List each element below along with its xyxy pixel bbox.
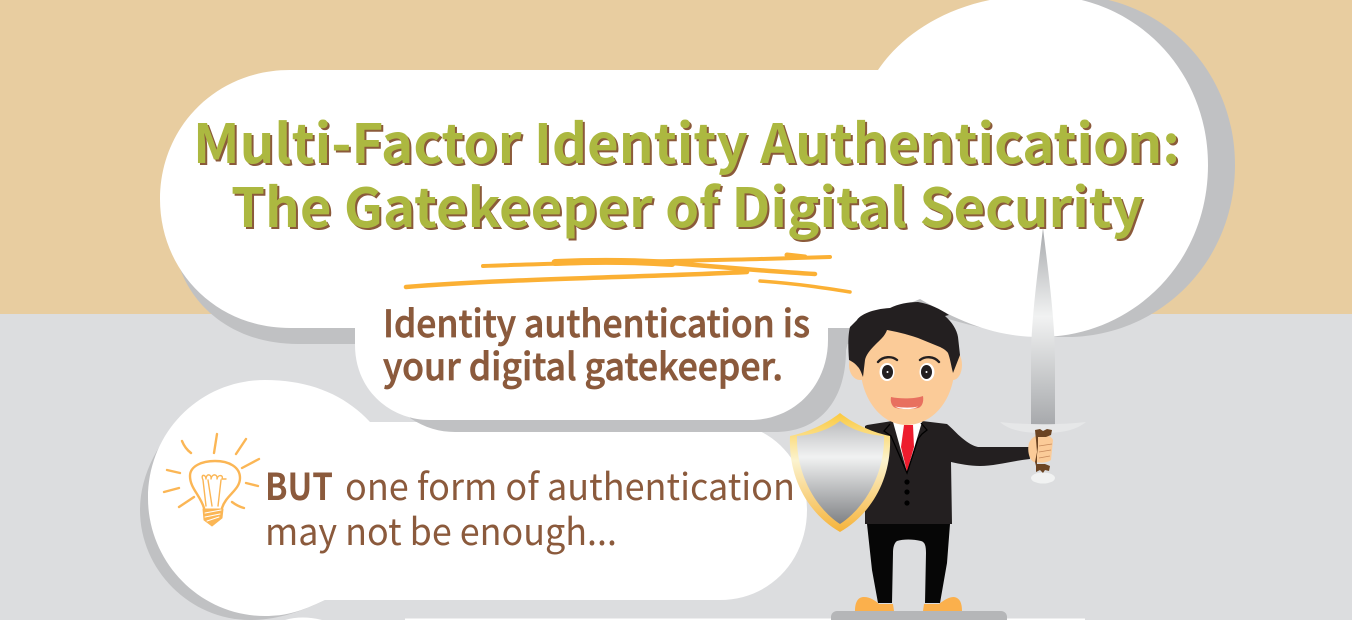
eyes xyxy=(880,363,934,381)
text: one form may not be enough: one form of authentication xyxy=(345,457,795,511)
sword pommel xyxy=(1031,472,1055,484)
panel: title cloud bubble xyxy=(160,0,1235,344)
background: tan upper band xyxy=(0,0,1352,314)
trousers xyxy=(867,524,950,603)
shoes xyxy=(855,597,962,611)
red tie xyxy=(901,425,914,472)
text: digital gatekeeper statement xyxy=(383,294,810,391)
sword xyxy=(1000,228,1086,484)
heading: main title: The Gatekeeper of Digital Security xyxy=(233,166,1145,245)
panel: lightbulb message bubble xyxy=(140,380,807,620)
character pedestal xyxy=(831,611,1007,620)
heading: main title: Multi-Factor Identity Authentication: xyxy=(195,102,1182,181)
hand xyxy=(1028,435,1053,463)
text: one form may not be enough xyxy=(265,457,795,556)
hair xyxy=(848,302,960,377)
suit jacket and arm xyxy=(865,421,1030,524)
text: one form may not be enough: BUT xyxy=(265,457,333,511)
heading: main title xyxy=(193,100,1182,245)
text: digital gatekeeper statement: your digital gatekeeper. xyxy=(383,337,783,391)
ears xyxy=(849,350,962,380)
heading: main title: Multi-Factor Identity Authentication: xyxy=(193,100,1180,179)
face xyxy=(860,315,954,425)
shirt collar xyxy=(893,422,922,472)
sword crossguard xyxy=(1000,422,1086,433)
shield xyxy=(790,413,890,532)
text: one form may not be enough: may not be enough... xyxy=(265,502,617,556)
background: gray lower band xyxy=(0,314,1352,620)
sword grip xyxy=(1035,429,1052,473)
icon: lightbulb xyxy=(164,434,259,526)
panel: gatekeeper speech bubble xyxy=(355,322,852,432)
jacket lapels and buttons xyxy=(884,423,927,506)
character: gatekeeper with sword and shield xyxy=(790,228,1086,620)
fingers xyxy=(1039,444,1052,458)
next bubble peeking at the bottom edge xyxy=(285,618,1085,620)
eyebrows xyxy=(878,357,939,362)
orange scribble underline xyxy=(406,255,850,292)
sword blade xyxy=(1031,228,1055,425)
mouth xyxy=(891,396,923,409)
heading: main title: The Gatekeeper of Digital Security xyxy=(231,164,1143,243)
text: digital gatekeeper statement: Identity authentication is xyxy=(383,294,810,348)
